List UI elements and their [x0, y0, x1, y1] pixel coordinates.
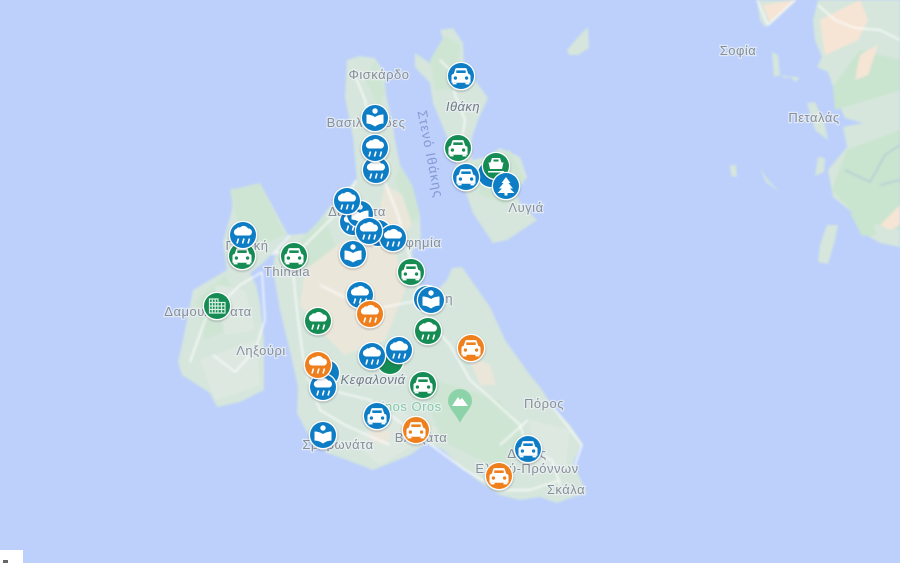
label: Petalas: Πεταλάς [788, 110, 840, 125]
marker: blue hidden Sami [413, 285, 441, 313]
marker: blue rain Paliki [229, 221, 257, 249]
forest patches [195, 35, 530, 470]
label: Efimia: Ευφημία [389, 235, 441, 250]
map: land masses [178, 0, 900, 503]
label: municipality Elios-Pronnon: Ελειού-Πρόννων [475, 461, 579, 476]
marker: blue hidden C [364, 219, 392, 247]
marker: blue book [361, 104, 389, 132]
marker: green car Ithaki [444, 134, 472, 162]
marker: blue car [452, 163, 480, 191]
label: Ithaki strait: Στενό Ιθάκης [415, 109, 446, 199]
marker: blue car [363, 402, 391, 430]
marker: green hidden [376, 347, 404, 375]
label: Skala: Σκάλα [547, 482, 585, 497]
label: Ainos Oros: Ainos Oros [372, 399, 442, 414]
marker: blue rain Argostoli [309, 373, 337, 401]
marker: blue rain [385, 336, 413, 364]
island: Ithaca [415, 28, 537, 243]
label: Damoulianata: Δαμουλιάνατα [164, 304, 252, 319]
map control stub [0, 550, 23, 563]
mainland forest [832, 50, 900, 236]
island: Paliki peninsula [178, 183, 288, 407]
marker: blue rain [346, 281, 374, 309]
label: Ithaki: Ιθάκη [446, 99, 480, 114]
label: Lixouri: Ληξούρι [236, 343, 286, 358]
marker: blue rain [358, 342, 386, 370]
marker: blue car Ithaki [447, 62, 475, 90]
islet: Atokos [567, 27, 589, 55]
island: Kefalonia main body [273, 56, 587, 503]
marker: green boat [482, 152, 510, 180]
marker: orange car [457, 334, 485, 362]
marker: green car Paliki [228, 242, 256, 270]
marker: blue book centre [339, 240, 367, 268]
road network [190, 0, 900, 490]
marker: blue rain lower [362, 156, 390, 184]
marker: blue rain east [379, 224, 407, 252]
marker: blue car south [514, 435, 542, 463]
label: municipality: Δήμος [507, 446, 547, 461]
marker: blue hidden B [346, 200, 374, 228]
label: Poros: Πόρος [524, 396, 564, 411]
marker: orange rain [356, 300, 384, 328]
label: Fiskardo: Φισκάρδο [348, 67, 410, 82]
label: Thinaia: Thinaia [264, 264, 310, 279]
marker: blue tree [492, 172, 520, 200]
terrain: beige highlands [300, 185, 496, 445]
pin: Ainos mountain [448, 389, 472, 423]
marker: blue book Sami [417, 286, 445, 314]
marker: blue book Svoronata [309, 421, 337, 449]
label: Paliki: Παλική [225, 238, 269, 253]
label: Svoronata: Σβορωνάτα [302, 437, 374, 452]
marker: green rain [414, 317, 442, 345]
marker: green building [203, 292, 231, 320]
label: Vasilikiades: Βασιλικιάδες [327, 115, 405, 130]
marker: blue hidden A [339, 208, 367, 236]
marker: green car Thinaia [280, 242, 308, 270]
marker: blue rain [361, 134, 389, 162]
label: Vlachata: Βλαχάτα [395, 430, 447, 445]
label: Sofia: Σοφία [720, 43, 756, 58]
marker: green car [409, 371, 437, 399]
marker: blue hidden Argostoli [312, 359, 340, 387]
marker: blue hidden [477, 160, 505, 188]
markers [203, 62, 542, 490]
islets and mainland [813, 0, 900, 247]
terrain: mainland beige [763, 0, 900, 230]
labels [164, 43, 840, 497]
marker: blue rain centre [355, 217, 383, 245]
lighter terrain patches [200, 285, 570, 475]
marker: green car [397, 258, 425, 286]
water: Lake and river [845, 145, 900, 185]
label: Sami: Σάμη [421, 291, 453, 306]
label: Lygia: Λυγιά [508, 200, 544, 215]
label: Kefalonia: Κεφαλονιά [340, 372, 406, 387]
marker: blue rain top [333, 187, 361, 215]
marker: orange car south [485, 462, 513, 490]
label: Dilinata: Δειλινάτα [328, 204, 386, 219]
marker: green rain [304, 307, 332, 335]
marker: orange rain Argostoli [304, 351, 332, 379]
marker: orange car [402, 416, 430, 444]
